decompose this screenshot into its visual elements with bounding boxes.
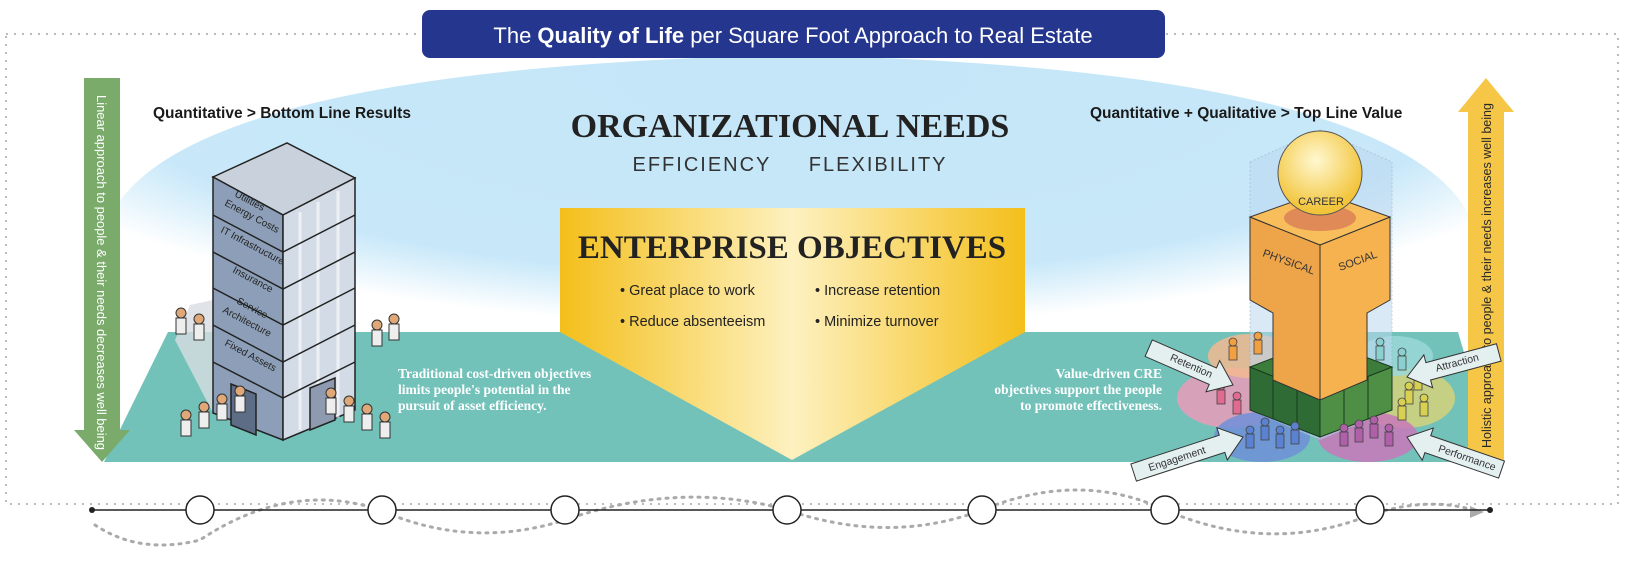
- building: IT Infrastructure: [219, 225, 286, 268]
- arrow: engagement: Engagement: [1147, 444, 1207, 474]
- tower: [1177, 130, 1455, 462]
- left heading: Quantitative > Bottom Line Results: [153, 105, 411, 122]
- title: The Quality of Life per Square Foot Approach to Real Estate: [493, 23, 1093, 48]
- building: Insurance: [231, 265, 275, 295]
- building: Energy Costs: [223, 198, 281, 236]
- arrow: retention: [1142, 333, 1240, 401]
- organizational needs: ORGANIZATIONAL NEEDS: [571, 108, 1009, 145]
- right body text: objectives support the people: [994, 382, 1162, 397]
- enterprise objectives chevron: ENTERPRISE OBJECTIVES: [578, 230, 1006, 266]
- arrow: performance: [1401, 421, 1507, 486]
- building: [213, 143, 355, 440]
- timeline: [89, 490, 1493, 545]
- enterprise objectives chevron: • Increase retention: [815, 283, 940, 299]
- right arrow: [1458, 78, 1514, 462]
- tower: CAREER: [1298, 196, 1344, 208]
- arrow: attraction: [1403, 336, 1503, 393]
- left arrow: [74, 78, 130, 462]
- building: Fixed Assets: [223, 338, 278, 374]
- building: Service: [235, 296, 270, 322]
- title: [422, 10, 1165, 58]
- right heading: Quantitative + Qualitative > Top Line Value: [1090, 105, 1403, 122]
- tower: PHYSICAL: [1261, 248, 1316, 277]
- organizational needs: EFFICIENCY FLEXIBILITY: [632, 154, 948, 176]
- tower: SOCIAL: [1337, 249, 1379, 274]
- right body text: Value-driven CRE: [1056, 366, 1162, 381]
- enterprise objectives chevron: • Reduce absenteeism: [620, 314, 765, 330]
- arrow: engagement: [1128, 421, 1248, 489]
- right arrow: Holistic approach to people & their needs increases well being: [1480, 103, 1494, 448]
- enterprise objectives chevron: [560, 208, 1025, 460]
- left arrow: Linear approach to people & their needs decreases well being: [94, 95, 108, 450]
- building: Architecture: [221, 305, 273, 340]
- building: Utilities: [233, 189, 266, 214]
- organizational needs: [571, 108, 1009, 176]
- left body text: pursuit of asset efficiency.: [398, 398, 546, 413]
- people around building: [176, 308, 399, 438]
- left body text: limits people's potential in the: [398, 382, 571, 397]
- enterprise objectives chevron: • Great place to work: [620, 283, 756, 299]
- left body text: Traditional cost-driven objectives: [398, 366, 591, 381]
- teal ground: [104, 332, 1496, 462]
- arrow: attraction: Attraction: [1434, 352, 1480, 375]
- arrow: retention: Retention: [1168, 352, 1214, 381]
- arrow: performance: Performance: [1437, 443, 1497, 474]
- right body text: to promote effectiveness.: [1020, 398, 1162, 413]
- enterprise objectives chevron: • Minimize turnover: [815, 314, 939, 330]
